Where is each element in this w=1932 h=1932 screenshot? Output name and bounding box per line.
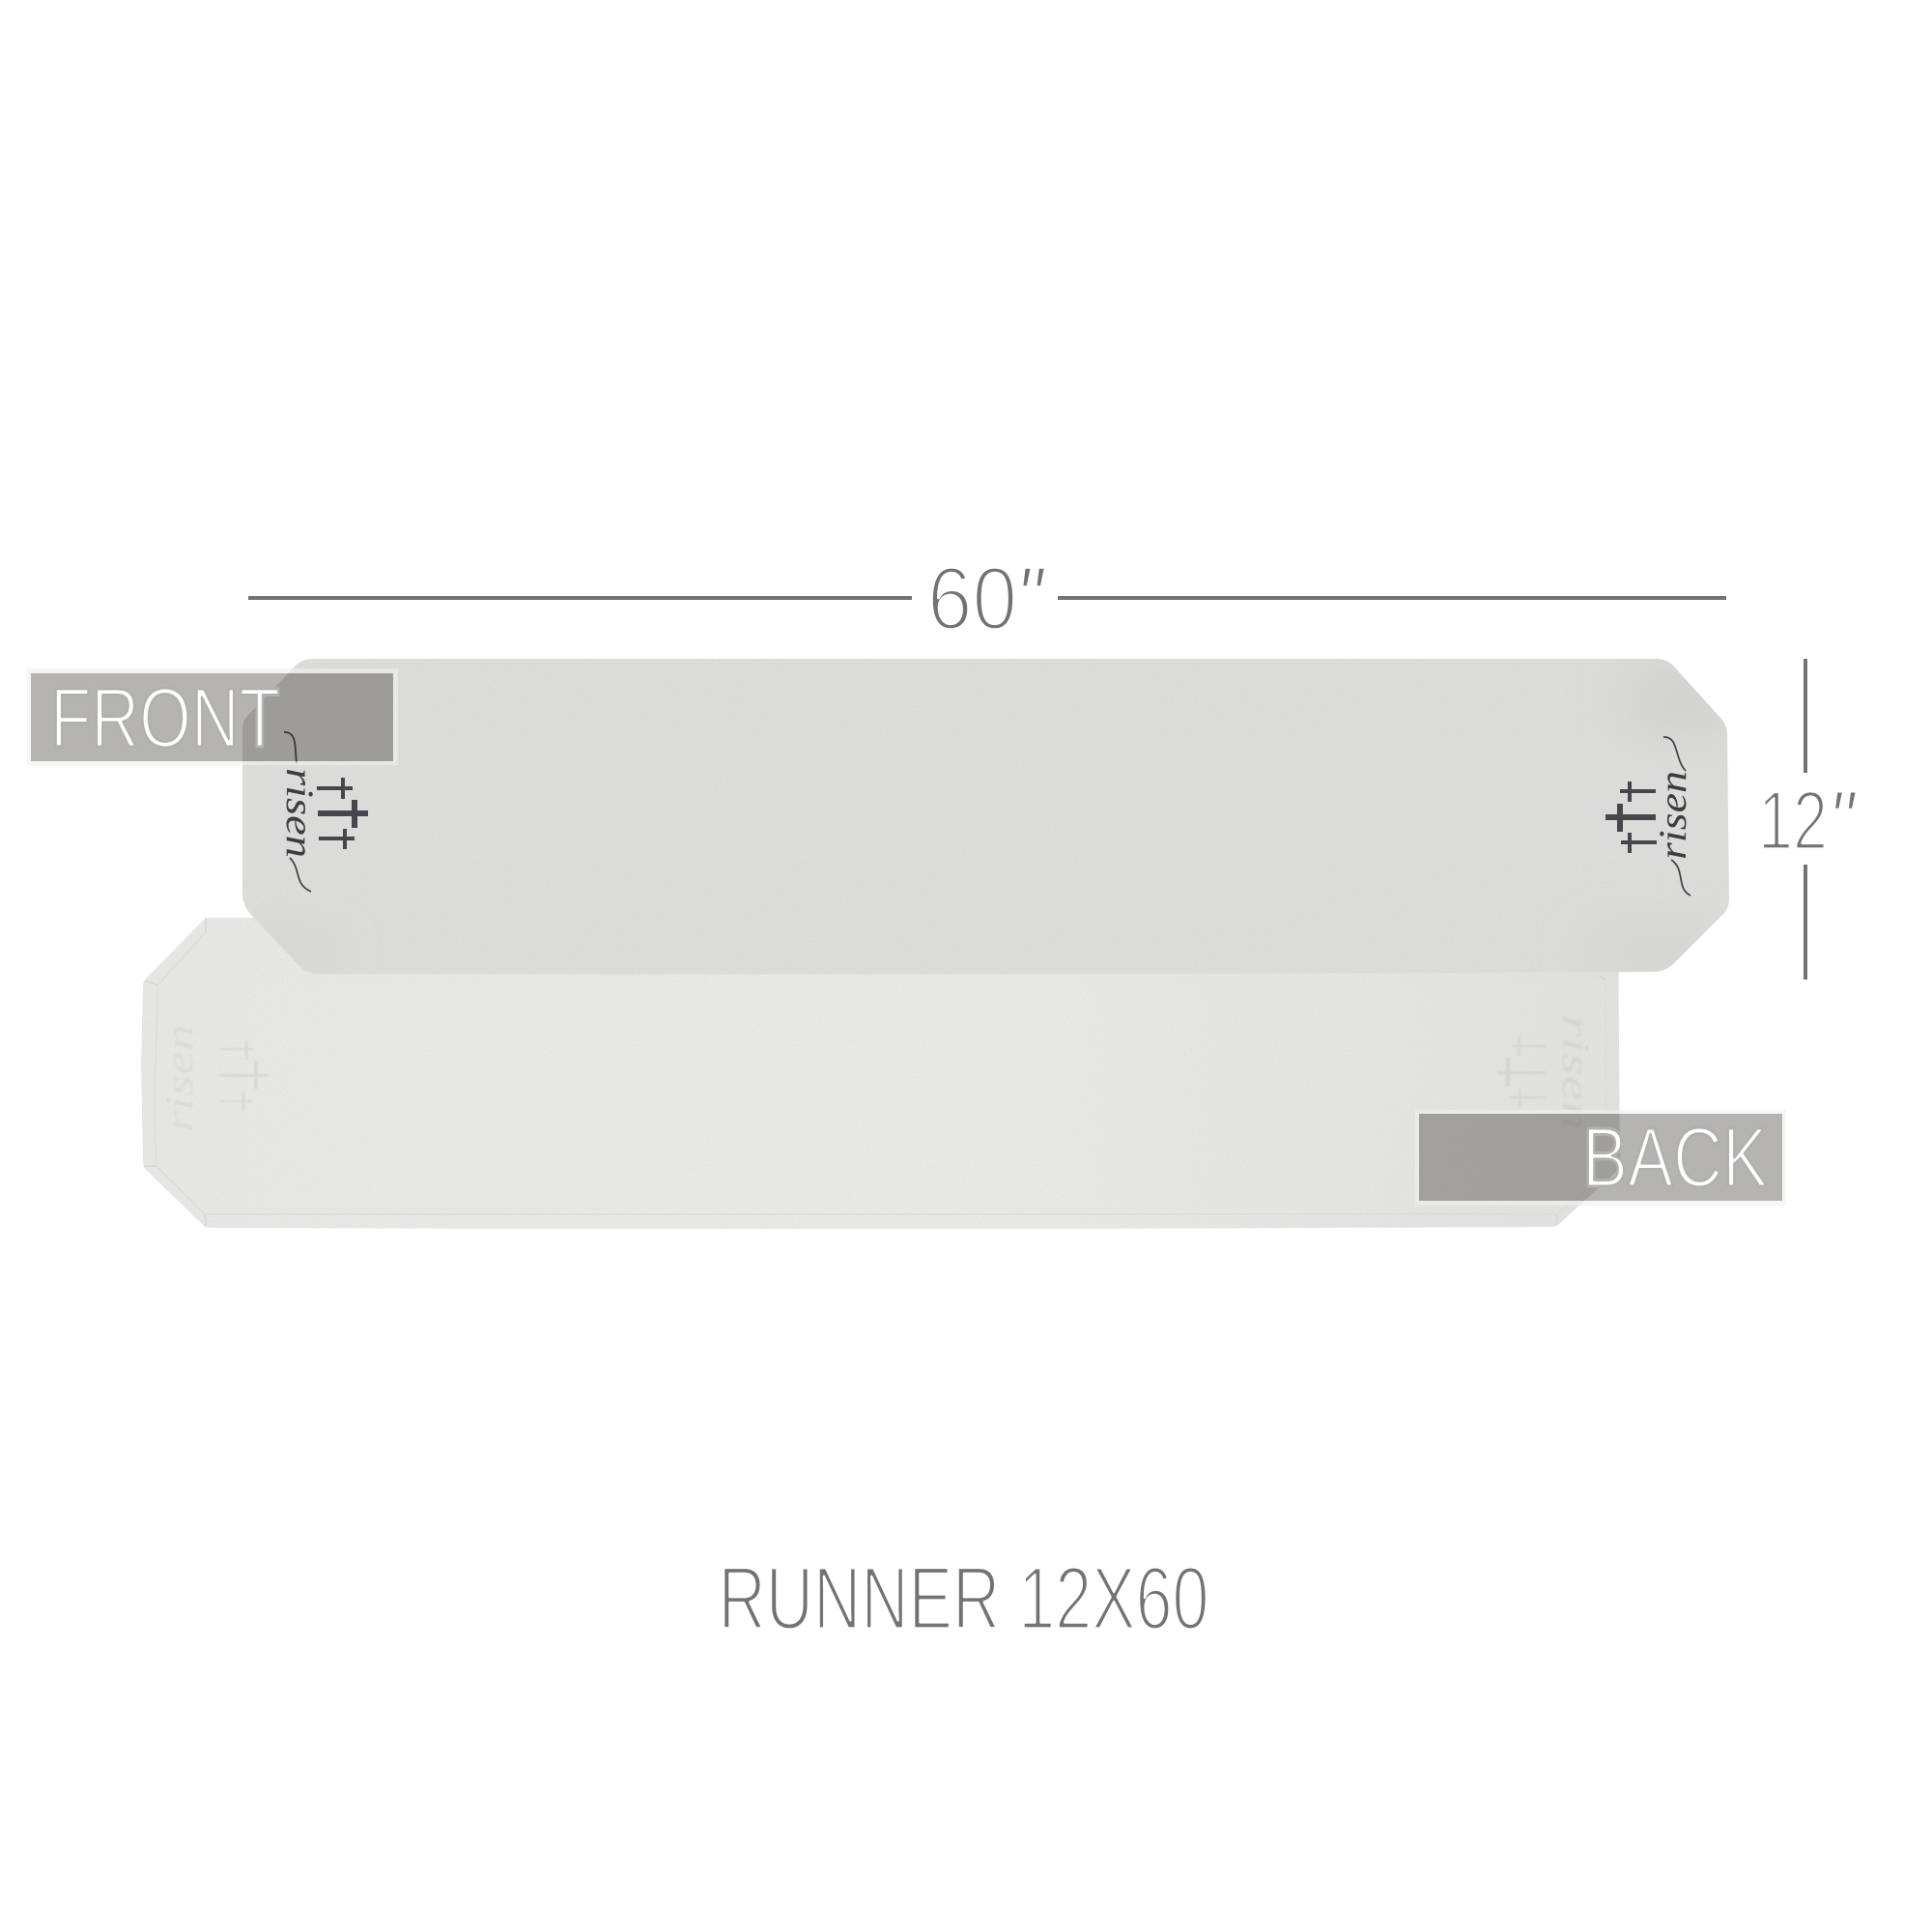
caption: RUNNER 12X60 — [719, 1549, 1209, 1648]
back runner panel — [135, 913, 1628, 1236]
label: BACK: BACK — [1582, 1111, 1768, 1205]
back ghost print: left: risen — [157, 1024, 201, 1132]
front print: left crosses — [317, 778, 368, 849]
front print: right script word — [1651, 737, 1694, 895]
back ghost print: right: risen — [1554, 1014, 1598, 1130]
label: FRONT: FRONT — [50, 671, 280, 765]
back ghost print: left — [157, 1024, 269, 1132]
height dimension: 12 inches: 12 — [1758, 775, 1828, 867]
front print: right crosses — [1605, 781, 1657, 853]
height dimension: 12 inches: " — [1828, 775, 1857, 867]
label: BACK — [1415, 1110, 1786, 1206]
front print: right script word: risen — [1651, 771, 1694, 860]
height dimension: 12 inches — [1758, 659, 1857, 980]
width dimension: 60 inches: " — [1015, 550, 1046, 648]
front print: left script word — [278, 732, 322, 892]
front runner panel — [222, 655, 1739, 979]
width dimension: 60 inches: 60 — [927, 550, 1017, 648]
front print: left script word: risen — [278, 768, 322, 858]
back ghost print: right — [1497, 1014, 1598, 1130]
width dimension: 60 inches — [248, 550, 1726, 648]
